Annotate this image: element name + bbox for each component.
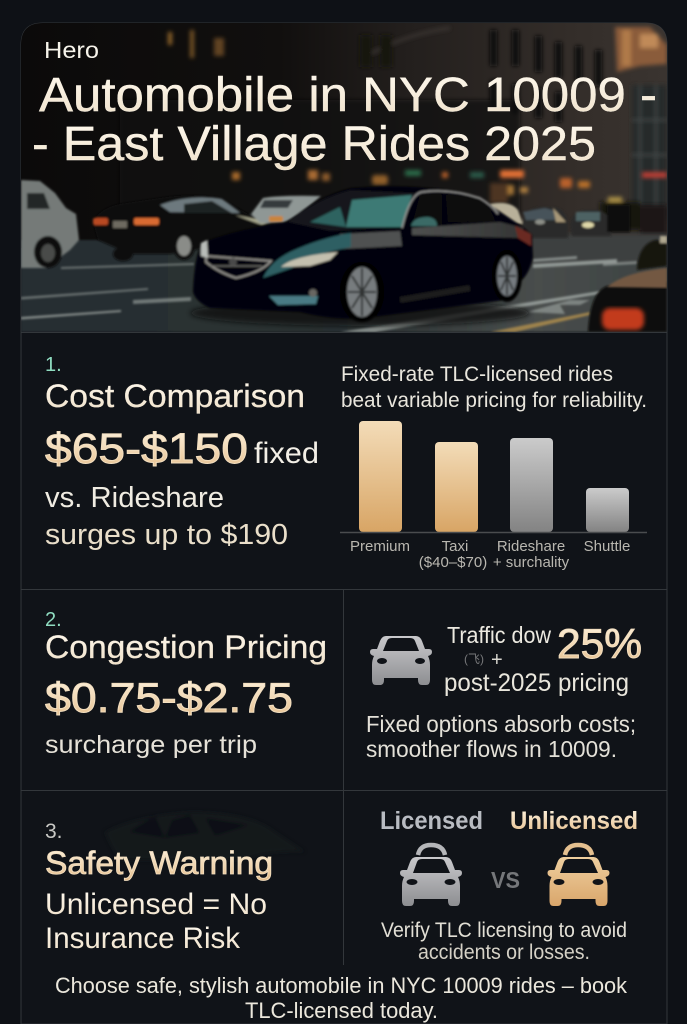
rideshare comparison text <box>45 482 288 551</box>
footer call to action: TLC-licensed today. <box>245 998 438 1023</box>
background cars <box>21 180 667 270</box>
licensing advice: accidents or losses. <box>418 941 590 964</box>
traffic stat: post-2025 pricing <box>444 669 629 697</box>
section number 2: 2. <box>45 609 62 631</box>
chart caption: Fixed-rate TLC-licensed rides <box>341 363 613 386</box>
licensing advice: Verify TLC licensing to avoid <box>381 919 627 942</box>
road markings <box>21 256 637 332</box>
rideshare comparison text: surges up to $190 <box>45 519 288 551</box>
traffic explanation <box>366 711 636 762</box>
heading: safety warning: Safety Warning <box>45 845 273 881</box>
heading: congestion pricing: Congestion Pricing <box>45 629 327 665</box>
hero title: Automobile in NYC 10009 - <box>39 69 657 122</box>
traffic stat: Traffic dow <box>447 622 551 648</box>
comparison labels: Licensed <box>380 807 483 835</box>
traffic stat: + <box>491 649 503 671</box>
price stat: fixed <box>254 437 319 470</box>
vs label: VS <box>491 867 520 893</box>
comparison labels <box>380 807 638 835</box>
panel: hero <box>21 23 667 332</box>
warning text: Insurance Risk <box>45 922 241 955</box>
hero label: Hero <box>44 37 99 63</box>
foreground car with tail light <box>588 268 667 332</box>
panel: safety warning <box>45 807 638 964</box>
bar chart <box>340 421 647 571</box>
hero title: - East Village Rides 2025 <box>32 118 596 171</box>
icon: car front <box>370 636 432 685</box>
warning text <box>45 888 267 955</box>
traffic explanation: smoother flows in 10009. <box>366 736 617 762</box>
hero title <box>32 69 657 171</box>
main black sedan <box>190 186 533 326</box>
footer call to action: Choose safe, stylish automobile in NYC 10009 rides – book <box>55 973 628 998</box>
section number 1: 1. <box>45 354 62 376</box>
chart caption <box>341 363 647 412</box>
bar chart: ($40–$70) <box>419 554 487 571</box>
bar chart: Rideshare <box>497 538 565 555</box>
price stat: $65-$150 <box>45 425 248 473</box>
section dividers <box>21 332 667 965</box>
icon: unlicensed car <box>548 845 610 906</box>
panel: cost comparison <box>45 354 647 571</box>
bar chart: Shuttle <box>584 538 630 555</box>
traffic explanation: Fixed options absorb costs; <box>366 711 636 737</box>
traffic stat: (飞) <box>464 652 484 666</box>
comparison labels: Unlicensed <box>510 807 638 835</box>
bar chart: + surchality <box>493 554 570 571</box>
surcharge note: surcharge per trip <box>45 731 257 759</box>
section number 3: 3. <box>45 820 63 843</box>
chart caption: beat variable pricing for reliability. <box>341 389 647 412</box>
hero photo: street scene <box>21 23 667 332</box>
heading: cost comparison: Cost Comparison <box>45 378 305 414</box>
icon: licensed car <box>400 845 462 906</box>
price stat <box>45 425 319 473</box>
surcharge stat: $0.75-$2.75 <box>45 674 293 721</box>
bar chart: Taxi <box>442 538 468 555</box>
traffic stat <box>444 620 642 697</box>
footer call to action <box>55 973 628 1023</box>
warning text: Unlicensed = No <box>45 888 267 921</box>
panel: congestion pricing <box>45 609 642 762</box>
faded car watermark <box>105 812 305 860</box>
licensing advice <box>381 919 627 964</box>
bar chart: Premium <box>350 538 410 555</box>
rideshare comparison text: vs. Rideshare <box>45 482 224 514</box>
traffic stat: 25% <box>557 620 642 667</box>
